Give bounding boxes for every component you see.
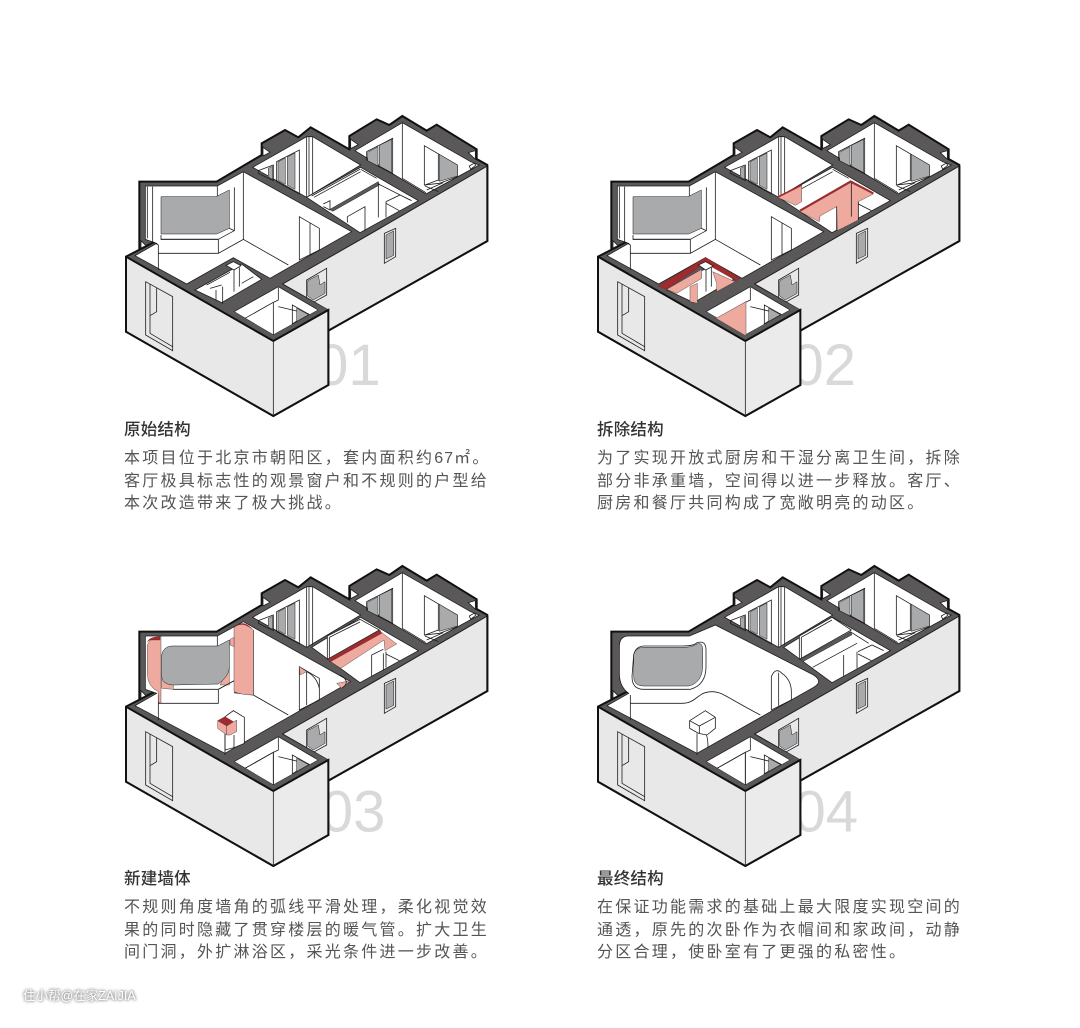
heading: original structure: 原始结构 [124, 420, 191, 438]
curved living room lines [630, 642, 791, 720]
text block: original structure [124, 420, 491, 512]
demolished wall in front room [716, 302, 746, 336]
panel: final structure drawing 04 [597, 564, 960, 868]
body: demolition: 部分非承重墙，空间得以进一步释放。客厅、 [597, 473, 962, 490]
living room floor [135, 622, 351, 753]
new curved walls [147, 623, 253, 703]
number 03: 03 [321, 780, 385, 845]
body: final structure [597, 898, 962, 961]
living room floor [607, 625, 819, 753]
body: original structure: 客厅极具标志性的观景窗户和不规则的户型给 [124, 473, 489, 490]
bath zone final [784, 617, 890, 683]
isometric shell [598, 566, 959, 866]
text block: new walls [124, 870, 489, 961]
heading: new walls: 新建墙体 [124, 870, 191, 888]
front room wall [245, 752, 273, 785]
body: demolition [597, 449, 962, 512]
bath zone [307, 167, 418, 233]
front room wall [717, 752, 745, 785]
isometric shell [126, 566, 487, 866]
isometric shell [598, 116, 959, 416]
number 02: 02 [791, 333, 856, 398]
body: new walls: 间门洞，外扩淋浴区，采光条件进一步改善。 [124, 944, 489, 961]
body: new walls: 果的同时隐藏了贯穿楼层的暖气管。扩大卫生 [124, 922, 489, 939]
heading: final structure: 最终结构 [597, 870, 664, 888]
text block: demolition [597, 420, 962, 512]
radiator column box [218, 711, 244, 755]
living room [135, 172, 352, 284]
panel: original structure drawing 01 [125, 114, 488, 418]
column box [690, 711, 715, 755]
isometric shell [126, 116, 487, 416]
heading: demolition: 拆除结构 [597, 420, 664, 438]
body: original structure: 本次改造带来了极大挑战。 [124, 495, 343, 512]
number 04: 04 [793, 780, 858, 845]
body: new walls [124, 898, 489, 961]
watermark: 住小帮@在家ZAIJIA [23, 989, 136, 1003]
body: new walls: 不规则角度墙角的弧线平滑处理，柔化视觉效 [124, 899, 489, 916]
body: demolition: 为了实现开放式厨房和干湿分离卫生间，拆除 [597, 450, 962, 467]
small room with demolished walls [658, 257, 740, 303]
text block: final structure [597, 870, 962, 961]
body: final structure: 在保证功能需求的基础上最大限度实现空间的 [597, 899, 962, 916]
bath zone with new walls [312, 617, 418, 683]
small demolished room [195, 262, 262, 304]
panel: new walls drawing 03 [125, 564, 488, 868]
body: final structure: 通透，原先的次卧作为衣帽间和家政间，动静 [597, 922, 962, 939]
body: original structure [124, 449, 491, 512]
bath zone with demolished walls [777, 167, 890, 233]
number 01: 01 [316, 333, 381, 398]
panel: demolition drawing 02 [597, 114, 960, 418]
body: demolition: 厨房和餐厅共同构成了宽敞明亮的动区。 [597, 495, 926, 512]
body: original structure: 本项目位于北京市朝阳区，套内面积约67㎡。 [124, 450, 491, 467]
living room lines [158, 630, 351, 720]
living room [607, 172, 824, 284]
body: final structure: 分区合理，使卧室有了更强的私密性。 [597, 944, 907, 961]
